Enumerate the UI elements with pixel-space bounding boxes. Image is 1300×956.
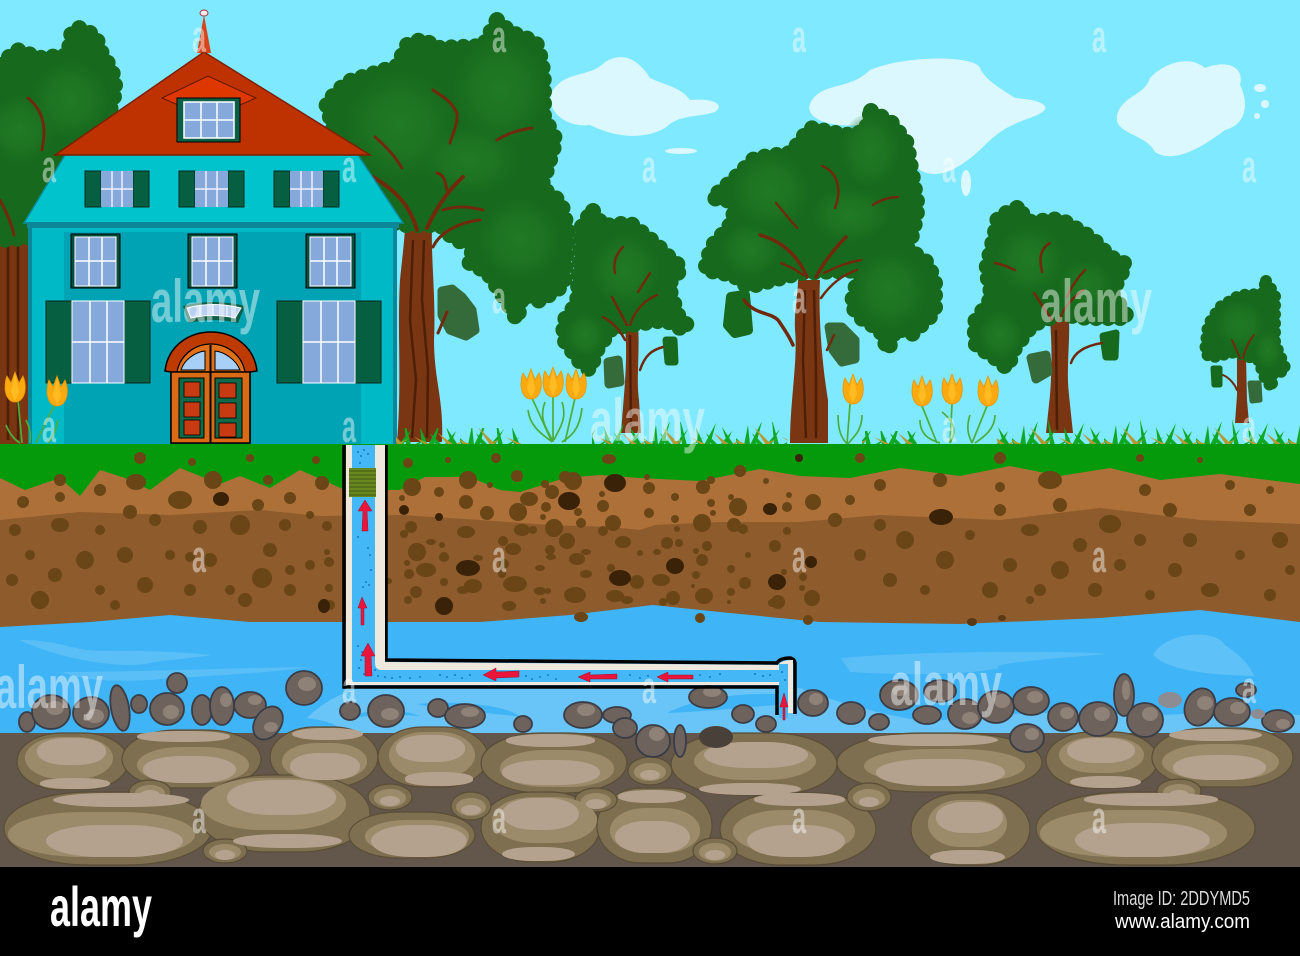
footer logo: alamy — [50, 875, 152, 938]
main wall — [27, 222, 399, 444]
house — [24, 10, 403, 444]
small watermark marks: a — [342, 401, 357, 452]
dormer — [162, 76, 256, 142]
small watermark marks: a — [192, 792, 207, 843]
small watermark marks: a — [492, 792, 507, 843]
tree 3 — [563, 211, 687, 433]
small watermark marks: a — [1242, 141, 1257, 192]
tulips — [5, 367, 998, 444]
tree far left — [0, 28, 116, 446]
main roof — [55, 52, 370, 155]
water in pipe — [352, 445, 788, 718]
roof spire — [197, 10, 211, 53]
middle windows — [71, 234, 355, 288]
large watermark logos: alamy — [1040, 268, 1152, 335]
grass tufts — [396, 416, 1300, 446]
sky — [0, 0, 1300, 446]
small watermark marks: a — [342, 141, 357, 192]
small watermark marks: a — [1242, 401, 1257, 452]
large tree beside house — [326, 20, 568, 442]
small watermark marks: a — [1092, 11, 1107, 62]
water darker streaks — [345, 694, 777, 718]
large watermark logos: alamy — [590, 387, 705, 454]
small watermark marks: a — [792, 11, 807, 62]
pipe casing — [344, 445, 795, 715]
red flow arrows — [358, 500, 788, 720]
rock highlights — [46, 677, 1290, 741]
pipe walls — [346, 445, 793, 713]
mansard upper wall — [24, 155, 403, 223]
stone highlights and caps — [37, 728, 1266, 864]
website: www.alamy.com — [1114, 911, 1250, 933]
small watermark marks: a — [342, 662, 357, 713]
soil layers — [0, 444, 1300, 640]
small watermark marks: a — [192, 11, 207, 62]
well pipe — [344, 445, 795, 720]
small watermark marks: a — [642, 141, 657, 192]
bedrock — [0, 733, 1300, 867]
small watermark marks: a — [1092, 792, 1107, 843]
dark soil stones — [213, 454, 953, 615]
gravel rocks — [19, 671, 1294, 757]
topsoil — [0, 466, 1300, 540]
lower windows with shutters — [46, 301, 381, 383]
stone outer bodies — [4, 727, 1293, 865]
large watermark logos — [0, 268, 1152, 721]
small watermark marks: a — [42, 141, 57, 192]
small watermark marks: a — [792, 272, 807, 323]
small watermark marks: a — [492, 531, 507, 582]
well screen filter — [349, 468, 376, 497]
subsoil — [0, 508, 1300, 640]
bedrock stones — [4, 727, 1293, 865]
grass band — [0, 444, 1300, 500]
image id: Image ID: 2DDYMD5 — [1113, 888, 1250, 910]
tree 6 — [1205, 281, 1286, 423]
small watermark marks: a — [192, 531, 207, 582]
small watermark marks: a — [42, 401, 57, 452]
small watermark marks: a — [1242, 662, 1257, 713]
clouds — [551, 57, 1269, 196]
small watermark marks: a — [792, 531, 807, 582]
large watermark logos: alamy — [890, 651, 1002, 718]
stone middle layers — [8, 732, 1279, 861]
groundwater layer — [0, 605, 1300, 735]
small watermark marks: a — [792, 792, 807, 843]
footer bar — [0, 867, 1300, 956]
water highlights — [20, 635, 1300, 733]
small watermark marks: a — [942, 401, 957, 452]
small watermark marks: a — [1092, 531, 1107, 582]
small watermark marks: a — [492, 11, 507, 62]
small watermark marks: a — [492, 272, 507, 323]
tree 5 — [974, 208, 1128, 433]
water bubbles — [357, 449, 786, 681]
transom window — [183, 302, 245, 323]
front door — [165, 332, 257, 443]
small watermark marks: a — [942, 141, 957, 192]
small watermark marks: a — [642, 662, 657, 713]
large watermark logos: alamy — [151, 268, 260, 335]
large watermark logos: alamy — [0, 654, 103, 721]
soil dots — [6, 452, 1295, 611]
tree 4 — [705, 111, 935, 443]
upper windows with shutters — [85, 171, 339, 207]
